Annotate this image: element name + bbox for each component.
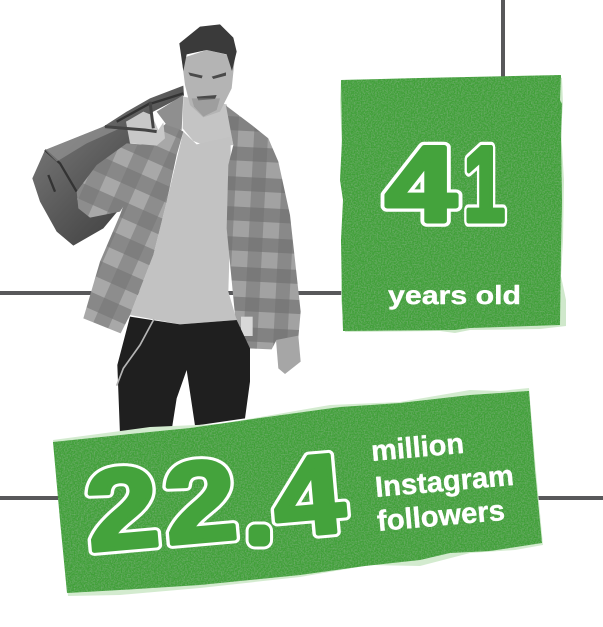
number: 41: 4: [386, 125, 456, 244]
number: 22.4: 2: [159, 435, 242, 568]
bag strap: [105, 102, 157, 132]
number: 41: 4: [386, 125, 456, 244]
number: 22.4: 2: [81, 442, 164, 575]
shirt right panel: [226, 106, 301, 349]
label: million Instagram followers: [370, 428, 515, 538]
green paper: [340, 75, 562, 331]
panel: followers: [53, 388, 543, 596]
number: 22.4: 4: [268, 431, 349, 561]
hair: [179, 24, 237, 71]
label: million Instagram followers: million: [370, 428, 465, 468]
neck: [183, 97, 233, 148]
torn paper edge: [340, 76, 566, 333]
panel: age: [340, 75, 566, 333]
shirt collar: [157, 95, 183, 130]
green paper: [53, 391, 542, 593]
shirt label: [241, 317, 253, 336]
number: 22.4: .: [251, 486, 268, 553]
stubble: [192, 98, 220, 117]
shirt left panel: [83, 122, 183, 333]
facial features: [188, 72, 226, 100]
number: 41: [386, 124, 505, 244]
left hand: [126, 112, 165, 146]
number: 22.4: 2: [159, 435, 242, 568]
grid lines: [0, 0, 603, 500]
right hand: [276, 336, 301, 374]
number: 41: 1: [464, 124, 505, 244]
label: years old: years old: [388, 280, 521, 310]
shirt sleeve: [77, 143, 157, 218]
t-shirt: [130, 132, 237, 324]
bag: [32, 86, 184, 246]
number: 22.4: [81, 431, 349, 575]
face: [182, 50, 235, 117]
jeans: [117, 317, 250, 434]
label: million Instagram followers: followers: [376, 495, 506, 538]
wallet chain: [117, 319, 154, 386]
photo: man with shoulder bag: [32, 24, 301, 434]
label: million Instagram followers: Instagram: [374, 460, 515, 504]
number: 22.4: .: [251, 486, 268, 553]
number: 41: 1: [464, 124, 505, 244]
number: 22.4: 4: [268, 431, 349, 561]
torn paper edge: [53, 388, 543, 596]
number: 22.4: 2: [81, 442, 164, 575]
